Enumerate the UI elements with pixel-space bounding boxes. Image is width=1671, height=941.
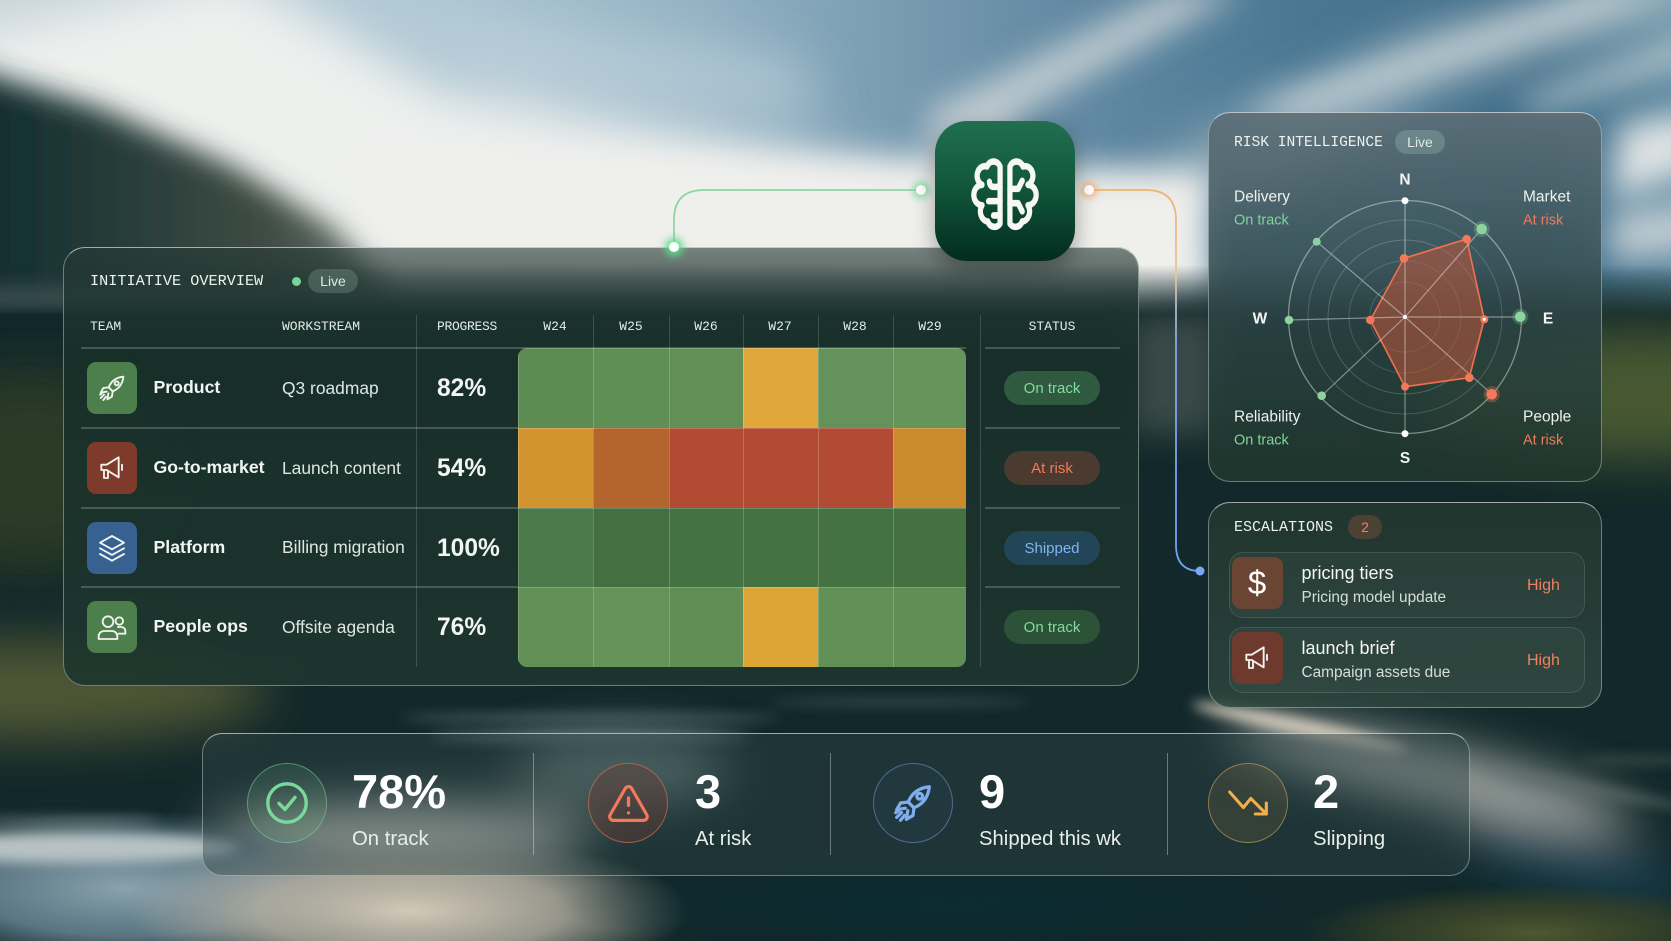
KPI: shipped this week	[873, 763, 1121, 850]
escalation: pricing tiers: Pricing model update	[1302, 589, 1446, 606]
connector: orange to escalations	[1082, 183, 1204, 576]
icon: warning triangle	[588, 763, 668, 843]
row: People ops	[87, 601, 1100, 653]
panel title: RISK INTELLIGENCE	[1234, 135, 1383, 151]
status: shipped	[1004, 531, 1100, 565]
icon: megaphone	[87, 442, 137, 494]
KPI: slipping: Slipping	[1313, 828, 1385, 850]
risk polygon	[1370, 239, 1484, 387]
KPI: at risk: 3	[695, 765, 721, 818]
escalation: pricing tiers	[1229, 552, 1585, 618]
KPI: on track	[247, 763, 446, 850]
live badge	[1395, 130, 1445, 154]
live badge	[308, 269, 358, 293]
count badge: 2	[1361, 519, 1369, 535]
row: People ops: Offsite agenda	[282, 617, 395, 637]
KPI: slipping	[1208, 763, 1385, 850]
table header row: WORKSTREAM	[282, 319, 360, 334]
compass labels	[1253, 172, 1553, 467]
table header row: W29	[918, 319, 942, 334]
status: on track	[1004, 371, 1100, 405]
icon: trending down	[1208, 763, 1288, 843]
row: Platform: 100%	[437, 535, 500, 562]
icon: people	[87, 601, 137, 653]
axis labels: On track	[1234, 432, 1290, 448]
icon: dollar: $	[1248, 564, 1266, 601]
panel title: ESCALATIONS	[1234, 519, 1333, 536]
live badge: Live	[320, 273, 346, 289]
compass labels: N	[1399, 172, 1411, 188]
row: People ops: 76%	[437, 614, 486, 641]
table header row: W28	[843, 319, 867, 334]
status: on track	[1004, 610, 1100, 644]
axis labels: On track	[1234, 212, 1290, 228]
table header row: W26	[694, 319, 718, 334]
escalation: pricing tiers: pricing tiers	[1302, 563, 1394, 583]
escalation: launch brief: Campaign assets due	[1302, 664, 1450, 681]
icon: dollar	[1232, 557, 1282, 609]
escalation: launch brief: launch brief	[1302, 638, 1395, 658]
status: on track: On track	[1024, 380, 1080, 397]
soft ground tones	[0, 810, 420, 941]
table header row: W25	[619, 319, 643, 334]
outer axis dots	[1285, 197, 1528, 437]
compass labels: E	[1543, 310, 1553, 328]
icon: layers	[87, 522, 137, 574]
compass labels: W	[1253, 310, 1268, 328]
compass labels: S	[1400, 450, 1410, 467]
axis labels: People	[1523, 408, 1571, 426]
radar chart	[1234, 172, 1571, 467]
KPI: shipped this week: Shipped this wk	[979, 828, 1121, 850]
KPI: on track: On track	[352, 828, 429, 850]
connector: green to overview	[665, 182, 929, 256]
axis labels: At risk	[1523, 432, 1564, 448]
table header row: W24	[543, 319, 567, 334]
escalation: launch brief	[1229, 627, 1585, 693]
live badge: Live	[1407, 134, 1433, 150]
axis labels	[1234, 188, 1571, 448]
icon: brain tile	[935, 121, 1075, 261]
row: Go-to-market: Launch content	[282, 458, 401, 478]
axis labels: At risk	[1523, 212, 1564, 228]
row: Go-to-market: 54%	[437, 455, 486, 482]
live indicator dot	[292, 277, 301, 286]
icon: check circle	[247, 763, 327, 843]
panel: KPI summary	[202, 733, 1470, 876]
row: Platform: Billing migration	[282, 537, 405, 557]
table header row	[90, 319, 1075, 334]
row: Platform	[87, 522, 1100, 574]
KPI: on track: 78%	[352, 765, 446, 818]
status: on track: On track	[1024, 619, 1080, 636]
row: Product: Product	[154, 377, 220, 397]
axis labels: Delivery	[1234, 188, 1290, 206]
icon: rocket	[87, 362, 137, 414]
row: Product: Q3 roadmap	[282, 378, 379, 398]
panel title: INITIATIVE OVERVIEW	[90, 272, 263, 290]
row: Platform: Platform	[154, 537, 225, 557]
panel: escalations	[1208, 502, 1602, 708]
table header row: STATUS	[1029, 319, 1075, 334]
KPI: at risk	[588, 763, 752, 850]
panel: risk intelligence	[1208, 112, 1602, 482]
status: shipped: Shipped	[1024, 540, 1080, 557]
KPI: at risk: At risk	[695, 828, 751, 850]
table header row: W27	[768, 319, 792, 334]
table header row: PROGRESS	[437, 319, 497, 334]
table header row: TEAM	[90, 319, 121, 334]
escalation: pricing tiers: High	[1527, 577, 1560, 594]
row: Go-to-market	[87, 442, 1100, 494]
row: Product	[87, 362, 1100, 414]
row: Go-to-market: Go-to-market	[154, 457, 265, 477]
row: Product: 82%	[437, 375, 486, 402]
polygon vertices	[1366, 235, 1488, 391]
escalation: launch brief: High	[1527, 652, 1560, 669]
axis labels: Reliability	[1234, 408, 1301, 426]
axis labels: Market	[1523, 188, 1571, 206]
count badge	[1348, 515, 1382, 539]
row: People ops: People ops	[154, 616, 248, 636]
panel: initiative overview	[63, 247, 1139, 686]
icon: rocket	[873, 763, 953, 843]
status: at risk: At risk	[1031, 460, 1073, 477]
heatmap W24-W29	[518, 348, 966, 667]
KPI: shipped this week: 9	[979, 765, 1005, 818]
status: at risk	[1004, 451, 1100, 485]
KPI: slipping: 2	[1313, 765, 1339, 818]
icon: megaphone	[1232, 632, 1282, 684]
